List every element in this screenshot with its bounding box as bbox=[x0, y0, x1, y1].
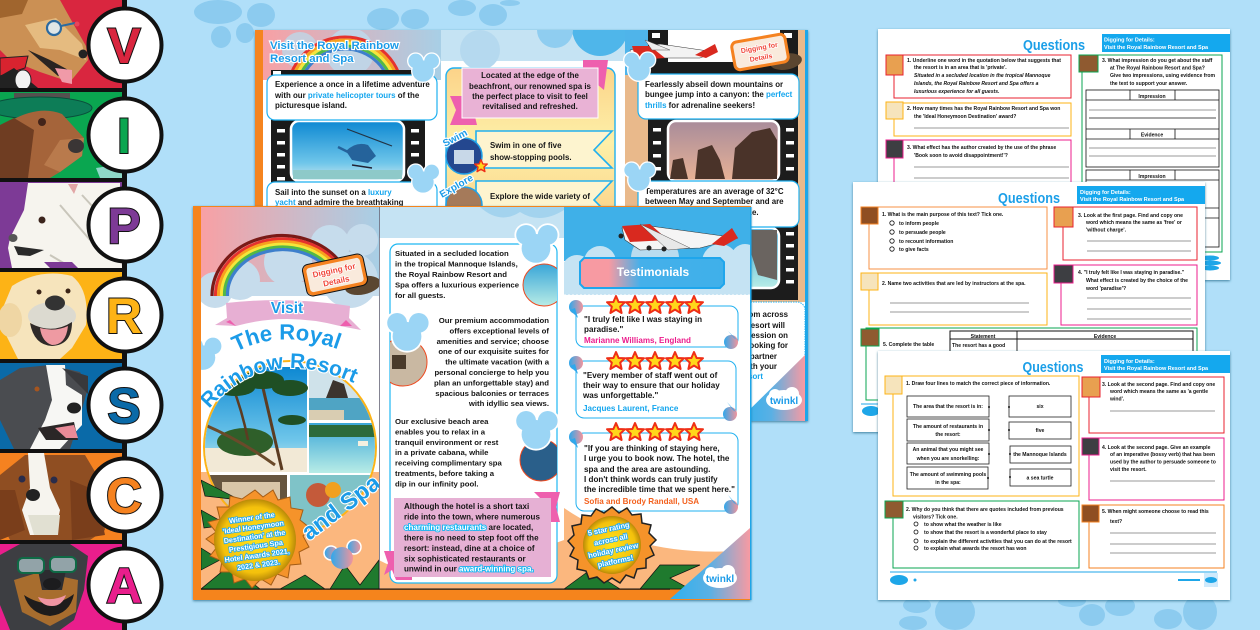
letter C: C bbox=[106, 468, 142, 524]
heading: Questions bbox=[1023, 38, 1085, 54]
testimonial 3: "If you are thinking of staying here, bbox=[584, 444, 720, 453]
question 1 matching: six bbox=[1036, 404, 1044, 410]
paragraph: beach: treatments, before taking a bbox=[395, 469, 495, 478]
testimonial 3 bbox=[569, 423, 738, 514]
paragraph: accommodation: plan an unforgettable stay) and bbox=[434, 378, 549, 387]
question 4: 4. Look at the second page. Give an example bbox=[1102, 445, 1211, 451]
question 5: Statement bbox=[971, 334, 996, 340]
question 1: the resort is in an area that is 'private'. bbox=[914, 65, 1007, 71]
heading: Questions bbox=[998, 191, 1060, 207]
question 5: 5. Complete the table bbox=[883, 342, 934, 348]
band: A pink with rottweiler bbox=[0, 544, 122, 630]
question 1 matching: when you are snorkelling: bbox=[916, 456, 980, 462]
question 1: to inform people bbox=[899, 221, 939, 227]
question 3: 'Book soon to avoid disappointment!'? bbox=[914, 153, 1008, 159]
question 4 with tables: at The Royal Rainbow Resort and Spa? bbox=[1110, 66, 1205, 72]
text box: thrills: bungee jump into a canyon: the perfect bbox=[645, 90, 793, 99]
question 1 matching bbox=[885, 376, 1079, 496]
question 1 bbox=[861, 207, 1047, 269]
small rainbow bbox=[291, 36, 399, 70]
paragraph: beach: in a private cabana, while bbox=[395, 448, 489, 457]
front brochure bbox=[191, 205, 753, 603]
question 1: luxurious experience for all guests. bbox=[914, 89, 1000, 95]
film holes bbox=[653, 128, 794, 284]
question 1 matching: An animal that you might see bbox=[913, 447, 984, 453]
paragraph: accommodation: one of our exquisite suites for bbox=[438, 347, 549, 356]
paragraph: beach: receiving complimentary spa bbox=[395, 459, 503, 468]
letter C bbox=[88, 458, 162, 532]
question 4: What effect is created by the choice of the bbox=[1086, 278, 1188, 284]
text box: helicopter tours bbox=[267, 75, 437, 120]
testimonial 2: their way to ensure that our holiday bbox=[583, 381, 720, 390]
testimonial 3: I don't think words can truly justify bbox=[584, 475, 718, 484]
badge: digging for details: Details bbox=[749, 53, 773, 64]
paragraph: location bbox=[395, 249, 520, 300]
question 1 matching: The amount of swimming pools bbox=[910, 472, 986, 478]
closing text box: resort will bbox=[748, 321, 785, 330]
and Spa: and Spa bbox=[296, 469, 386, 545]
twinkl logo: twinkl bbox=[706, 574, 734, 585]
testimonial 1 bbox=[569, 296, 738, 349]
band: I green with bloodhound bbox=[0, 92, 122, 178]
rock sunset photo bbox=[668, 121, 779, 181]
title arc bbox=[201, 324, 358, 408]
closing text box bbox=[752, 302, 805, 379]
page 1: cover bbox=[201, 207, 379, 588]
question 3: 3. What effect has the author created by the use of the phrase bbox=[907, 145, 1056, 151]
VIPERS strip: dogs and letters bbox=[0, 0, 162, 630]
photo collage bbox=[200, 360, 380, 540]
question 2: the 'Ideal Honeymoon Destination' award? bbox=[914, 114, 1016, 120]
text box: temperatures bbox=[638, 181, 799, 227]
back brochure bbox=[255, 0, 808, 421]
ribbon: Visit: Visit bbox=[271, 300, 303, 317]
question 2 tick: 2. Why do you think that there are quotes included from previous bbox=[906, 507, 1064, 513]
pink spa box bbox=[462, 68, 598, 118]
text box: temperatures: between May and September and are bbox=[645, 197, 784, 206]
photo: cabana with paw bbox=[514, 409, 562, 481]
explore band: Explore the wide variety of bbox=[490, 192, 590, 201]
paragraph: accommodation: personal concierge to help you bbox=[434, 368, 549, 377]
letter V bbox=[88, 8, 162, 82]
question 3: 3. Look at the second page. Find and copy one bbox=[1102, 382, 1215, 388]
testimonial 3: Sofia and Brody Randall, USA bbox=[584, 497, 699, 506]
twinkl logo: twinkl bbox=[770, 396, 798, 407]
award starburst: Winner of the bbox=[229, 510, 275, 525]
paragraph: beach: dip in our infinity pool. bbox=[395, 479, 479, 488]
swim band bbox=[441, 128, 612, 174]
question 4 with tables: Impression bbox=[1138, 174, 1166, 180]
pink box: restaurants bbox=[394, 498, 551, 577]
letter A: A bbox=[106, 558, 142, 614]
question 1: Islands, the Royal Rainbow Resort and Spa offers a bbox=[914, 81, 1039, 87]
question 4 with tables: Give two impressions, using evidence from bbox=[1110, 73, 1215, 79]
worksheet 2 middle bbox=[853, 182, 1205, 432]
badge: digging for details: Digging for bbox=[312, 261, 357, 280]
letter S: S bbox=[107, 378, 141, 434]
question 2: 2. How many times has the Royal Rainbow Resort and Spa won bbox=[907, 106, 1060, 112]
twinkl logo bbox=[703, 565, 737, 588]
testimonial 1: paradise." bbox=[584, 325, 624, 334]
question 4 with tables: 3. What impression do you get about the staff bbox=[1102, 58, 1213, 64]
award starburst: 'Ideal Honeymoon bbox=[222, 518, 284, 536]
question 3: 3. Look at the first page. Find and copy one bbox=[1078, 213, 1183, 219]
paw badge bbox=[407, 52, 440, 83]
main beach photo bbox=[200, 367, 308, 472]
paragraph: accommodation: Our premium accommodation bbox=[439, 316, 549, 325]
title arc: Rainbow Resort bbox=[201, 353, 358, 408]
heading: Visit the Royal Rainbow bbox=[270, 40, 399, 52]
pink ribbons bbox=[450, 60, 608, 125]
band: S blue with collie bbox=[0, 363, 122, 449]
question 3: wind'. bbox=[1109, 396, 1125, 402]
question 2 tick bbox=[885, 501, 1079, 568]
award starburst: Hotel Awards 2021, bbox=[224, 546, 290, 564]
question 4 with tables: the text to support your answer. bbox=[1110, 81, 1188, 87]
villa photo bbox=[200, 475, 287, 535]
pink box: restaurants: unwind in our award-winning spa. bbox=[404, 564, 534, 574]
back panel 1: helicopter tours: Resort and Spa bbox=[270, 53, 354, 65]
twinkl mark bbox=[861, 404, 880, 416]
helicopter photo bbox=[291, 121, 404, 181]
title arc: The Royal bbox=[230, 324, 342, 350]
paragraph: beach: enables you to relax in a bbox=[395, 427, 486, 436]
closing text box: resort bbox=[741, 372, 763, 381]
question 2 tick: to show what the weather is like bbox=[924, 522, 1002, 528]
page 2: resort description bbox=[379, 207, 565, 589]
testimonial 2: was unforgettable." bbox=[582, 391, 659, 400]
award starburst: 2022 & 2023. bbox=[236, 557, 280, 572]
header tab bbox=[1102, 34, 1230, 52]
question 1 matching: the resort: bbox=[935, 432, 961, 438]
badge: digging for details: Details bbox=[322, 274, 351, 289]
swim band: Swim bbox=[441, 128, 470, 150]
pink box: restaurants: charming restaurants are located, bbox=[404, 523, 533, 532]
heading: Questions bbox=[1022, 360, 1084, 376]
corner triangle bbox=[752, 355, 805, 421]
pink box: restaurants: there is no need to step foot off the bbox=[404, 534, 539, 542]
question 2 bbox=[861, 273, 1047, 325]
header tab: Digging for Details: bbox=[1104, 359, 1155, 365]
closing text box: partner bbox=[750, 352, 777, 361]
worksheet 1 back bbox=[878, 29, 1230, 280]
film strip holes bbox=[277, 129, 419, 180]
testimonial 2: "Every member of staff went out of bbox=[583, 371, 718, 380]
lagoon photo bbox=[309, 423, 380, 473]
question 3 bbox=[1082, 377, 1224, 433]
rainbow bbox=[212, 236, 340, 296]
question 4 bbox=[1082, 438, 1224, 500]
paragraph: location: the Royal Rainbow Resort and bbox=[395, 270, 507, 279]
palm leaves bbox=[564, 565, 700, 589]
question 3: 'without charge'. bbox=[1086, 228, 1127, 234]
text box: luxury yacht: yacht and admire the breathtaking bbox=[275, 198, 404, 207]
question 4: word 'paradise'? bbox=[1085, 286, 1126, 292]
testimonial 1: "I truly felt like I was staying in bbox=[584, 315, 702, 324]
question 3: word which means the same as 'free' or bbox=[1085, 220, 1182, 226]
paragraph: accommodation: with idyllic sea views. bbox=[468, 399, 549, 408]
question 1 matching: five bbox=[1036, 428, 1045, 434]
question 5 bbox=[861, 328, 1197, 400]
question 1 matching: a sea turtle bbox=[1027, 476, 1054, 482]
paw gradient bbox=[324, 540, 361, 569]
question 4 bbox=[1054, 265, 1197, 325]
rating starburst bbox=[568, 507, 656, 583]
paw badge bbox=[407, 163, 440, 194]
question 5: 5. When might someone choose to read this bbox=[1102, 509, 1209, 515]
band: C orange with spaniel bbox=[0, 453, 122, 540]
testimonial 2: Jacques Laurent, France bbox=[583, 404, 679, 413]
paw badge bbox=[623, 51, 656, 82]
cliff photo bbox=[752, 228, 780, 290]
question 3: word which means the same as 'a gentle bbox=[1109, 389, 1208, 395]
text box: helicopter tours: picturesque island. bbox=[275, 101, 347, 110]
question 2 tick: to explain what awards the resort has won bbox=[924, 546, 1026, 552]
paragraph: accommodation bbox=[434, 316, 550, 408]
letter S bbox=[88, 368, 162, 442]
peach ground bbox=[201, 472, 379, 589]
text box: helicopter tours: with our private helicopter tours of the bbox=[274, 91, 420, 100]
text box: helicopter tours: Experience a once in a lifetime adventure bbox=[275, 80, 430, 89]
question 1: to recount information bbox=[899, 239, 953, 245]
letter I: I bbox=[117, 108, 131, 164]
band: V red with terrier bbox=[0, 0, 122, 90]
testimonial 3: I urge you to book now. The hotel, the bbox=[584, 454, 730, 463]
question 1 matching: in the spa: bbox=[935, 480, 961, 486]
swim band: Swim in one of five bbox=[490, 141, 562, 150]
pink box: restaurants: ride into the town, where numerous bbox=[404, 512, 540, 522]
closing text box: impression on bbox=[734, 331, 788, 340]
header tab: Visit the Royal Rainbow Resort and Spa bbox=[1080, 197, 1185, 203]
paragraph: beach bbox=[395, 417, 503, 488]
explore band: Explore bbox=[438, 173, 476, 201]
worksheet 3 front bbox=[878, 351, 1230, 600]
pink ribbons bbox=[384, 492, 560, 580]
question 5: text? bbox=[1110, 519, 1122, 525]
question 1 matching: 1. Draw four lines to match the correct piece of information. bbox=[906, 381, 1051, 387]
rating starburst: across all bbox=[593, 532, 628, 548]
band: P purple with white dog bbox=[0, 182, 122, 268]
palm leaves bbox=[201, 480, 379, 589]
closing text box: from across bbox=[743, 310, 789, 319]
paragraph: location: Situated in a secluded location bbox=[395, 249, 509, 258]
paragraph: location: Spa offers a luxurious experience bbox=[395, 280, 520, 290]
question 1: to persuade people bbox=[899, 230, 946, 236]
testimonial 3: the incredible time that we spent here." bbox=[584, 485, 735, 494]
paragraph: beach: Our exclusive beach area bbox=[395, 417, 489, 426]
photo: suite with paw bbox=[379, 311, 430, 386]
rating starburst: holiday review bbox=[587, 541, 639, 560]
pink box: restaurants: six sophisticated restaurants or bbox=[404, 554, 527, 564]
question 5: Evidence bbox=[1094, 334, 1116, 340]
closing text box: with your bbox=[741, 362, 777, 371]
plane bbox=[618, 224, 738, 252]
paragraph: accommodation: offers exceptional levels of bbox=[450, 326, 549, 335]
question 1: 1. Underline one word in the quotation below that suggests that bbox=[907, 58, 1061, 64]
badge: digging for details: Digging for bbox=[740, 42, 779, 55]
text box: temperatures: cooled by a gentle sea breeze. bbox=[645, 208, 759, 217]
paragraph: accommodation: amenities and service; choose bbox=[437, 337, 550, 346]
paw badge bbox=[623, 161, 656, 192]
question 1 bbox=[886, 55, 1071, 98]
letter V: V bbox=[107, 18, 141, 74]
header tab: Visit the Royal Rainbow Resort and Spa bbox=[1104, 45, 1209, 51]
header tab bbox=[1101, 355, 1230, 373]
swim band: show-stopping pools. bbox=[490, 153, 572, 162]
question 2 bbox=[886, 102, 1071, 136]
back panel 3: thrills bbox=[623, 30, 808, 421]
question 4 with tables: Impression bbox=[1138, 94, 1166, 100]
back panel 2: spa bbox=[438, 30, 625, 206]
question 1 matching: the Mannoque Islands bbox=[1013, 452, 1067, 458]
small plane bbox=[630, 40, 718, 60]
question 3 bbox=[1054, 207, 1197, 260]
twinkl mark bbox=[1199, 256, 1221, 270]
banner: testimonials bbox=[580, 258, 724, 288]
text box: thrills bbox=[638, 74, 799, 119]
question 1: to give facts bbox=[899, 247, 929, 253]
twinkl logo bbox=[766, 387, 802, 410]
letter I bbox=[88, 98, 162, 172]
closing text box: looking for bbox=[747, 341, 788, 350]
letter R bbox=[88, 278, 162, 352]
back panel 1: helicopter tours bbox=[263, 28, 441, 222]
award starburst: Destination' at the bbox=[223, 528, 286, 545]
question 4: used by the author to persuade someone to bbox=[1110, 460, 1216, 466]
testimonial 1: Marianne Williams, England bbox=[584, 336, 691, 345]
paragraph: beach: tranquil environment or rest bbox=[395, 438, 499, 447]
text box bbox=[390, 244, 557, 583]
text box: luxury yacht bbox=[266, 181, 438, 206]
letter A bbox=[88, 548, 162, 622]
question 2: 2. Name two activities that are led by instructors at the spa. bbox=[882, 281, 1026, 287]
question 2 tick: visitors? Tick one. bbox=[913, 514, 958, 520]
photo: beach with paw bbox=[514, 223, 565, 306]
question 4: visit the resort. bbox=[1110, 467, 1147, 473]
question 1 matching: The area that the resort is in: bbox=[913, 404, 983, 410]
text box: thrills: Fearlessly abseil down mountains or bbox=[645, 80, 783, 89]
badge: digging for details bbox=[730, 32, 802, 72]
pink spa box: revitalised and refreshed. bbox=[482, 102, 578, 111]
question 4: 4. "I truly felt like I was staying in paradise." bbox=[1078, 270, 1185, 276]
testimonial 2 bbox=[569, 352, 737, 421]
question 2 tick: to show that the resort is a wonderful place to stay bbox=[924, 530, 1047, 536]
text box: luxury yacht: Sail into the sunset on a luxury bbox=[275, 188, 392, 197]
question 2 tick: to explain the different activities that you can do at the resort bbox=[924, 539, 1072, 545]
explore band bbox=[438, 175, 614, 206]
paragraph: location: for all guests. bbox=[395, 291, 445, 300]
pink spa box: the perfect place to visit to feel bbox=[472, 92, 588, 101]
pink box: restaurants: Although the hotel is a short taxi bbox=[404, 502, 529, 511]
banner: testimonials: Testimonials bbox=[617, 265, 690, 279]
question 4 with tables bbox=[1079, 55, 1222, 252]
paw badge bbox=[185, 336, 223, 371]
band: R yellow with golden retriever bbox=[0, 272, 122, 359]
rock bay photo bbox=[309, 367, 380, 420]
letter P: P bbox=[107, 198, 141, 254]
text box: temperatures: Temperatures are an average of 32°C bbox=[645, 187, 784, 196]
question 4 with tables: Evidence bbox=[1141, 132, 1163, 138]
pink spa box: Located at the edge of the bbox=[481, 71, 579, 80]
header tab bbox=[1077, 186, 1205, 204]
footer bbox=[890, 572, 1218, 587]
letter P bbox=[88, 188, 162, 262]
pink box: restaurants: resort: instead, dine at a choice of bbox=[404, 544, 535, 553]
header tab: Digging for Details: bbox=[1080, 190, 1131, 196]
header tab: Digging for Details: bbox=[1104, 38, 1155, 44]
question 1: 1. What is the main purpose of this text? Tick one. bbox=[882, 212, 1004, 218]
paragraph: accommodation: spacious balconies or terraces bbox=[435, 389, 549, 398]
question 1: Situated in a secluded location in the tropical Mannoque bbox=[914, 73, 1051, 79]
question 5 bbox=[1082, 505, 1224, 568]
cocktail photo bbox=[290, 475, 380, 535]
award starburst: Prestigious Spa bbox=[228, 538, 284, 554]
rating starburst: 5 star rating bbox=[587, 520, 631, 538]
page 3: testimonials bbox=[562, 207, 759, 599]
pink spa box: beachfront, our renowned spa is bbox=[469, 82, 592, 91]
header tab: Visit the Royal Rainbow Resort and Spa bbox=[1104, 366, 1209, 372]
yellow feature box bbox=[446, 68, 615, 218]
question 3 bbox=[886, 140, 1071, 188]
text box: thrills: thrills for adrenaline seekers! bbox=[645, 101, 755, 110]
corner triangle bbox=[670, 528, 750, 599]
question 5: The resort has a good bbox=[952, 343, 1005, 349]
ribbon: Visit bbox=[215, 300, 361, 330]
testimonial 3: spa and the area are astounding. bbox=[584, 465, 710, 474]
letter R: R bbox=[106, 288, 142, 344]
paragraph: accommodation: the ultimate vacation (with a bbox=[445, 358, 550, 367]
peach ground bbox=[564, 508, 750, 589]
black dividers bbox=[0, 0, 127, 630]
paragraph: location: in the tropical Mannoque Islands, bbox=[395, 260, 518, 268]
question 1 matching: The amount of restaurants in bbox=[913, 424, 983, 430]
question 4: of an imperative (bossy verb) that has been bbox=[1110, 452, 1215, 458]
rating starburst: platforms! bbox=[597, 553, 634, 569]
badge: digging for details bbox=[301, 250, 382, 306]
award starburst bbox=[206, 490, 310, 588]
